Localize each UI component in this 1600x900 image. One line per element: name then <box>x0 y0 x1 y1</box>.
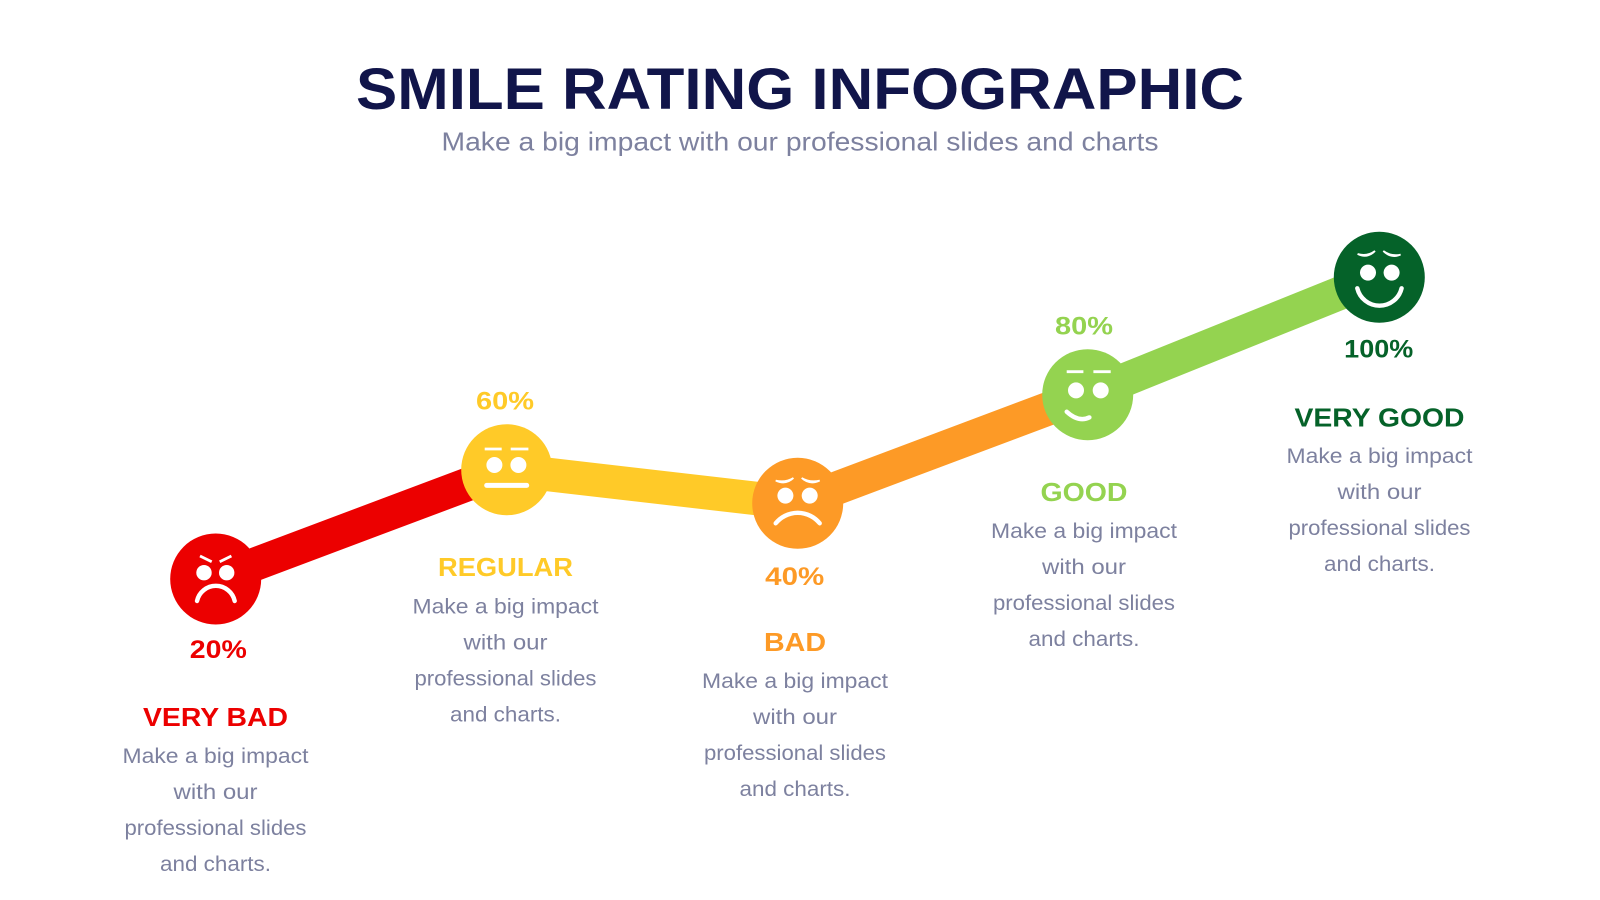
text block: very good <box>1286 402 1473 576</box>
percentage: 60%: 60% <box>476 388 534 416</box>
text block: bad <box>702 627 888 801</box>
text block: good <box>991 477 1177 651</box>
text block: very good: and charts. <box>1324 553 1435 576</box>
text block: regular: and charts. <box>450 704 561 726</box>
text block: very bad: professional slides <box>124 817 306 840</box>
text block: very bad <box>122 702 309 876</box>
text block: very bad: Make a big impact <box>122 745 309 768</box>
text block: very good: Make a big impact <box>1286 445 1473 468</box>
icon: very good face <box>1334 232 1425 323</box>
text block: very good: professional slides <box>1288 517 1470 540</box>
icon: bad face <box>752 458 843 549</box>
text block: very good: VERY GOOD <box>1294 402 1464 432</box>
text block: good: GOOD <box>1040 477 1128 507</box>
text block: good: with our <box>1041 556 1126 579</box>
text block: bad: professional slides <box>704 742 886 765</box>
text block: very good: with our <box>1336 481 1422 504</box>
text block: bad: BAD <box>764 627 826 657</box>
text block: good: and charts. <box>1028 628 1140 651</box>
connector lines <box>216 277 1379 579</box>
percentage: 40%: 40% <box>765 563 824 591</box>
icon: regular face <box>461 424 552 515</box>
text block: very bad: and charts. <box>160 853 271 876</box>
icon: very bad face <box>170 534 261 624</box>
text block: bad: Make a big impact <box>702 670 888 693</box>
percentage: 100%: 100% <box>1344 336 1413 364</box>
text block: regular: with our <box>462 632 548 654</box>
text block: good: professional slides <box>993 592 1175 615</box>
text block: bad: and charts. <box>740 778 850 801</box>
subtitle: Make a big impact with our professional slides and charts <box>442 126 1158 156</box>
percentage: 80%: 80% <box>1055 312 1113 340</box>
text block: regular: professional slides <box>414 668 596 690</box>
text block: bad: with our <box>752 706 837 729</box>
text block: regular <box>412 552 599 726</box>
text block: very bad: VERY BAD <box>143 702 288 732</box>
text block: very bad: with our <box>172 781 258 804</box>
title: SMILE RATING INFOGRAPHIC <box>356 57 1244 122</box>
text block: good: Make a big impact <box>991 520 1177 543</box>
percentage: 20%: 20% <box>190 636 247 664</box>
icon: good face <box>1042 349 1133 440</box>
text block: regular: Make a big impact <box>412 596 599 618</box>
text block: regular: REGULAR <box>438 552 573 582</box>
